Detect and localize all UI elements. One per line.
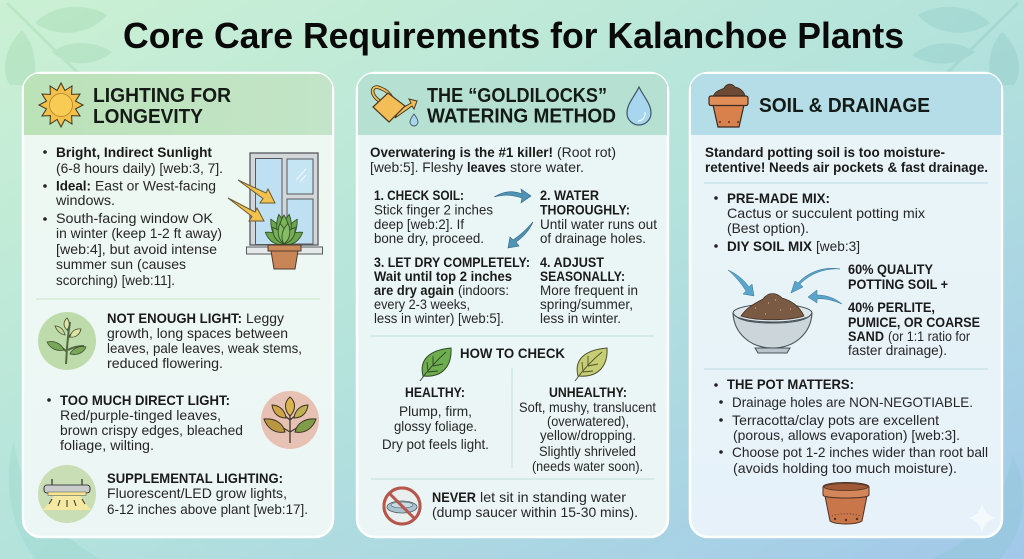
text block: the pot matters: Drainage holes are NON-NEGOTIABLE. (732, 394, 973, 410)
text block: step 4: less in winter. (540, 310, 621, 326)
text block: soil mix bullets (714, 190, 925, 254)
heading: goldilocks watering method: WATERING METHOD (427, 106, 616, 128)
text block: soil intro: retentive! Needs air pockets & fast drainage. (705, 159, 988, 175)
text block: overwatering intro: store water. (510, 159, 584, 175)
text block: sunlight bullets: [web:4], but avoid intense (56, 241, 217, 257)
title: Core Care Requirements for Kalanchoe Plants (123, 15, 904, 56)
decorative background leaves: top left (5, 3, 112, 85)
text block: sunlight bullets: scorching) [web:11]. (56, 272, 175, 288)
text block: step 1 (374, 187, 493, 246)
text block: sunlight bullets: summer sun (causes (56, 256, 186, 272)
text block: unhealthy: yellow/dropping. (540, 427, 636, 443)
text block: too much direct light (47, 392, 243, 453)
heading: lighting for longevity (93, 85, 232, 128)
text block: unhealthy: (overwatered), (547, 413, 629, 429)
text block: sunlight bullets (43, 144, 223, 288)
text block: overwatering intro: Overwatering is the #1 killer! (370, 144, 553, 160)
decorative background leaves: bottom corners (9, 440, 1023, 559)
text block: healthy: HEALTHY: (405, 384, 465, 400)
text block: the pot matters: THE POT MATTERS: (727, 376, 854, 392)
text block: step 4 (540, 254, 638, 326)
text block: sunlight bullets: Ideal: (56, 178, 91, 194)
text block: too much direct light: foliage, wilting. (60, 437, 154, 453)
text block: sunlight bullets: Bright, Indirect Sunlight (56, 144, 212, 160)
text block: sunlight bullets: East or West-facing (95, 178, 216, 194)
text block: step 2: of drainage holes. (540, 230, 646, 246)
text block: step 3: Wait until top 2 inches (374, 268, 512, 284)
text block: step 4: SEASONALLY: (540, 268, 625, 284)
panel: soil and drainage (690, 73, 1002, 537)
text block: soil mix bullets: Cactus or succulent potting mix (727, 205, 925, 221)
text block: soil mix bullets: DIY SOIL MIX (727, 238, 813, 254)
heading: lighting for longevity: LONGEVITY (93, 106, 204, 128)
text block: step 1: 1. CHECK SOIL: (374, 187, 464, 203)
text block: soil mix ratio: SAND (848, 328, 884, 344)
text block: not enough light: growth, long spaces between (107, 325, 288, 341)
text block: unhealthy: (needs water soon). (532, 458, 643, 474)
text block: unhealthy: Slightly shriveled (539, 443, 636, 459)
text block: healthy (382, 384, 489, 452)
icon: leggy plant (38, 312, 96, 370)
panel: lighting for longevity (23, 73, 333, 537)
icon: bowl of soil with arrows (728, 268, 842, 353)
icon: terracotta pot (823, 482, 869, 524)
text block: never: NEVER (432, 489, 476, 505)
icon: pot with soil (709, 84, 748, 127)
heading: goldilocks watering method (427, 85, 616, 128)
text block: the pot matters: (avoids holding too much moisture). (733, 460, 957, 476)
text block: healthy: Dry pot feels light. (382, 436, 489, 452)
decorative background leaves: top right (912, 3, 1019, 85)
text block: step 1: deep [web:2]. If (374, 216, 464, 232)
text block: sunlight bullets: South-facing window OK (56, 210, 214, 226)
panel: goldilocks watering method (357, 73, 668, 537)
text block: not enough light: leaves, pale leaves, weak stems, (107, 340, 302, 356)
text block: too much direct light: Red/purple-tinged leaves, (60, 407, 221, 423)
text block: the pot matters: (porous, allows evaporation) [web:3]. (733, 427, 960, 443)
text block: soil mix ratio: PUMICE, OR COARSE (848, 314, 980, 330)
text block: supplemental lighting (107, 470, 308, 517)
icon: sun (39, 83, 83, 127)
text block: soil mix ratio: faster drainage). (848, 342, 947, 358)
text block: soil mix ratio: 60% QUALITY (848, 261, 934, 277)
arrow: step 2 to step 3 (508, 222, 533, 248)
icon: watering can (373, 87, 418, 126)
text block: unhealthy: UNHEALTHY: (549, 384, 627, 400)
text block: supplemental lighting: Fluorescent/LED grow lights, (107, 485, 287, 501)
heading: soil and drainage: SOIL & DRAINAGE (759, 95, 930, 117)
text block: the pot matters (714, 376, 988, 476)
text block: step 1: Stick finger 2 inches (374, 202, 493, 218)
heading: goldilocks watering method: THE “GOLDILOCKS” (427, 85, 607, 107)
arrow: step 1 to step 2 (494, 189, 531, 203)
icon: water drop (627, 87, 651, 125)
text block: step 3 (374, 254, 530, 326)
text block: supplemental lighting: SUPPLEMENTAL LIGHTING: (107, 470, 283, 486)
icon: healthy leaf (420, 348, 451, 381)
text block: soil mix ratio: (or 1:1 ratio for (888, 328, 970, 344)
icon: unhealthy leaf (575, 348, 607, 381)
text block: soil mix ratio: 40% PERLITE, (848, 299, 935, 315)
icon: window with plant and sun arrows (228, 153, 322, 269)
text block: never (432, 489, 638, 520)
text block: step 4: spring/summer, (540, 296, 633, 312)
text block: the pot matters: Terracotta/clay pots are excellent (732, 412, 939, 428)
text block: overwatering intro: leaves (467, 159, 506, 175)
text block: step 3: less in winter) [web:5]. (374, 310, 504, 326)
text block: step 2: Until water runs out (540, 216, 657, 232)
icon: grow light (38, 465, 96, 523)
text block: step 1: bone dry, proceed. (374, 230, 484, 246)
text block: soil mix ratio: POTTING SOIL + (848, 276, 948, 292)
text block: step 4: 4. ADJUST (540, 254, 604, 270)
text block: overwatering intro (370, 144, 616, 175)
icon: sparkle (968, 503, 996, 533)
text block: sunlight bullets: windows. (55, 192, 115, 208)
text block: unhealthy: Soft, mushy, translucent (519, 399, 656, 415)
text block: supplemental lighting: 6-12 inches above plant [web:17]. (107, 501, 308, 517)
text block: step 3: every 2-3 weeks, (374, 296, 470, 312)
text block: soil intro (705, 144, 988, 175)
text block: not enough light (107, 310, 302, 371)
text block: step 2 (540, 187, 657, 246)
icon: scorched plant (261, 391, 319, 449)
text block: too much direct light: TOO MUCH DIRECT LIGHT: (60, 392, 230, 408)
text block: soil mix bullets: (Best option). (727, 220, 809, 236)
text block: soil mix bullets: [web:3] (816, 238, 860, 254)
text block: never: let sit in standing water (480, 489, 626, 505)
text block: not enough light: reduced flowering. (107, 355, 223, 371)
heading: how to check: HOW TO CHECK (460, 345, 565, 361)
text block: step 2: 2. WATER (540, 187, 599, 203)
text block: healthy: glossy foliage. (394, 418, 477, 434)
text block: healthy: Plump, firm, (399, 403, 472, 419)
text block: soil intro: Standard potting soil is too moisture- (705, 144, 945, 160)
text block: the pot matters: Choose pot 1-2 inches wider than root ball (732, 444, 988, 460)
text block: not enough light: NOT ENOUGH LIGHT: (107, 310, 242, 326)
text block: soil mix ratio (848, 261, 980, 358)
text block: sunlight bullets: in winter (keep 1-2 ft away) (56, 225, 222, 241)
text block: too much direct light: brown crispy edges, bleached (60, 422, 243, 438)
heading: lighting for longevity: LIGHTING FOR (93, 85, 232, 107)
text block: step 3: are dry again (374, 282, 454, 298)
text block: step 4: More frequent in (540, 282, 638, 298)
text block: not enough light: Leggy (246, 310, 284, 326)
text block: step 3: 3. LET DRY COMPLETELY: (374, 254, 530, 270)
text block: step 2: THOROUGHLY: (540, 202, 630, 218)
text block: unhealthy (519, 384, 656, 474)
text block: never: (dump saucer within 15-30 mins). (432, 504, 638, 520)
text block: overwatering intro: [web:5]. Fleshy (370, 159, 463, 175)
text block: overwatering intro: (Root rot) (557, 144, 616, 160)
text block: step 3: (indoors: (458, 282, 509, 298)
text block: soil mix bullets: PRE-MADE MIX: (727, 190, 830, 206)
text block: sunlight bullets: (6-8 hours daily) [web:3, 7]. (56, 160, 223, 176)
icon: no standing water saucer (383, 487, 421, 525)
